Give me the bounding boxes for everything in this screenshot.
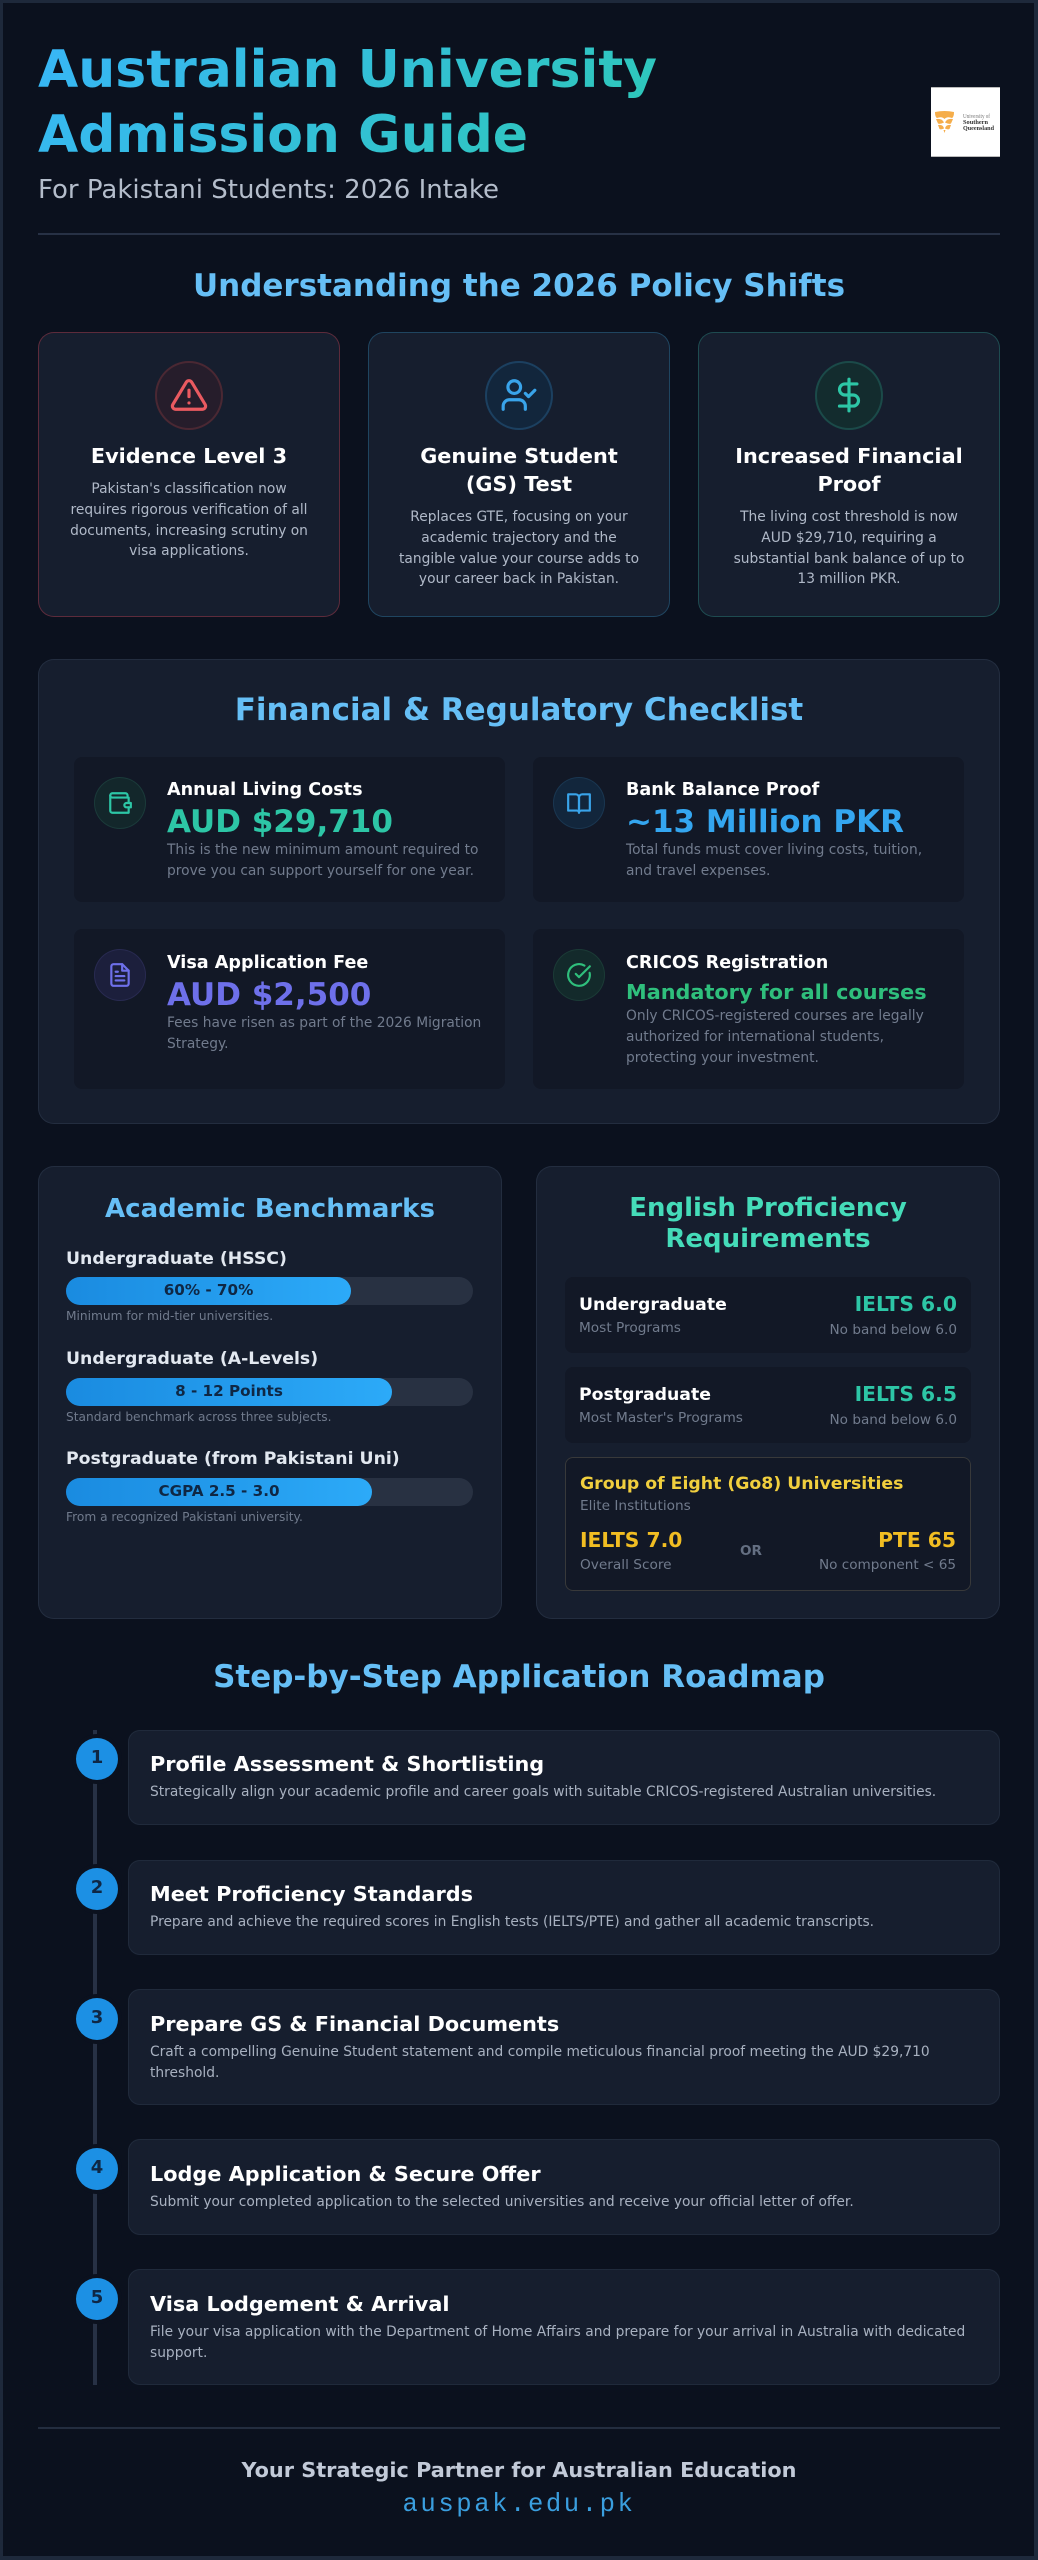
note: Minimum for mid-tier universities. bbox=[66, 1309, 273, 1323]
panel: financial checklist bbox=[38, 659, 1000, 1124]
logo: University of Southern Queensland: Queensland bbox=[963, 126, 995, 132]
footer tagline: Your Strategic Partner for Australian Education bbox=[241, 2458, 796, 2482]
description: authorized for international students, bbox=[626, 1029, 884, 1045]
label: Visa Application Fee bbox=[167, 953, 368, 973]
or separator: OR bbox=[740, 1543, 762, 1559]
card text: your career back in Pakistan. bbox=[419, 571, 619, 587]
description bbox=[626, 1008, 924, 1066]
box heading: Group of Eight (Go8) Universities bbox=[580, 1474, 903, 1494]
label: Undergraduate (HSSC) bbox=[66, 1249, 287, 1269]
card heading: (GS) Test bbox=[466, 472, 572, 496]
note: From a recognized Pakistani university. bbox=[66, 1510, 303, 1524]
IELTS note: Overall Score bbox=[580, 1557, 672, 1573]
value: ~13 Million PKR bbox=[626, 804, 904, 840]
score: IELTS 6.5 bbox=[855, 1382, 957, 1406]
step title: Profile Assessment & Shortlisting bbox=[150, 1752, 544, 1776]
bar: postgraduate: CGPA 2.5 - 3.0 bbox=[158, 1482, 280, 1500]
value: Mandatory for all courses bbox=[626, 980, 927, 1004]
step 5 number: 5 bbox=[91, 2287, 103, 2308]
card text: Replaces GTE, focusing on your bbox=[410, 509, 628, 525]
title: Admission Guide bbox=[38, 105, 528, 165]
card heading: Genuine Student bbox=[420, 444, 618, 468]
bar: A-Levels: 8 - 12 Points bbox=[175, 1382, 283, 1400]
card text: The living cost threshold is now bbox=[740, 509, 958, 525]
description: and travel expenses. bbox=[626, 863, 770, 879]
step title: Meet Proficiency Standards bbox=[150, 1882, 473, 1906]
step text: threshold. bbox=[150, 2065, 219, 2081]
description bbox=[167, 1015, 481, 1052]
step 5 card bbox=[128, 2269, 1000, 2385]
step 5 number bbox=[76, 2278, 118, 2320]
level: Postgraduate bbox=[579, 1385, 711, 1405]
step title: Prepare GS & Financial Documents bbox=[150, 2012, 559, 2036]
bar: postgraduate bbox=[66, 1478, 473, 1506]
bar: A-Levels bbox=[66, 1378, 473, 1406]
label: Undergraduate (A-Levels) bbox=[66, 1349, 318, 1369]
step 2 number: 2 bbox=[91, 1877, 103, 1898]
description bbox=[167, 842, 478, 879]
level note: Most Master's Programs bbox=[579, 1410, 743, 1426]
level note: Most Programs bbox=[579, 1320, 681, 1336]
step 3 number bbox=[76, 1998, 118, 2040]
note: Standard benchmark across three subjects. bbox=[66, 1410, 331, 1424]
step 2 card bbox=[128, 1860, 1000, 1955]
score: IELTS 6.0 bbox=[855, 1292, 957, 1316]
score note: No band below 6.0 bbox=[830, 1412, 957, 1428]
item: annual living costs bbox=[74, 757, 505, 902]
card text: academic trajectory and the bbox=[421, 530, 617, 546]
panel: Evidence Level 3 bbox=[38, 332, 340, 617]
label: Postgraduate (from Pakistani Uni) bbox=[66, 1449, 400, 1469]
step text: Prepare and achieve the required scores in English tests (IELTS/PTE) and gather all academic transcripts. bbox=[150, 1914, 874, 1930]
card text: documents, increasing scrutiny on bbox=[70, 523, 308, 539]
description: prove you can support yourself for one year. bbox=[167, 863, 474, 879]
icon: open book bbox=[553, 777, 605, 829]
description: Total funds must cover living costs, tuition, bbox=[626, 842, 922, 858]
description: This is the new minimum amount required to bbox=[167, 842, 478, 858]
step 1 number bbox=[76, 1738, 118, 1780]
step 3 card bbox=[128, 1989, 1000, 2105]
card text: substantial bank balance of up to bbox=[734, 551, 964, 567]
title: Australian University bbox=[38, 40, 657, 100]
step 2 number bbox=[76, 1868, 118, 1910]
title bbox=[38, 38, 658, 168]
icon: wallet bbox=[94, 777, 146, 829]
bar: HSSC: 60% - 70% bbox=[164, 1281, 253, 1299]
footer url: auspak.edu.pk bbox=[403, 2490, 635, 2519]
card text: 13 million PKR. bbox=[797, 571, 901, 587]
label: Annual Living Costs bbox=[167, 780, 363, 800]
heading: English Proficiency bbox=[629, 1193, 907, 1223]
step text: Craft a compelling Genuine Student statement and compile meticulous financial proof meeting the AUD $29,710 bbox=[150, 2044, 930, 2060]
label: Bank Balance Proof bbox=[626, 780, 819, 800]
step text: Submit your completed application to the selected universities and receive your official letter of offer. bbox=[150, 2194, 854, 2210]
icon: dollar sign bbox=[815, 361, 883, 430]
icon: user check bbox=[485, 361, 553, 430]
heading: roadmap: Step-by-Step Application Roadmap bbox=[213, 1659, 825, 1695]
description: Only CRICOS-registered courses are legally bbox=[626, 1008, 924, 1024]
item: CRICOS registration bbox=[533, 929, 964, 1089]
card heading: Increased Financial bbox=[735, 444, 963, 468]
subtitle: For Pakistani Students: 2026 Intake bbox=[38, 175, 499, 205]
panel: Genuine Student Test bbox=[368, 332, 670, 617]
step 3 number: 3 bbox=[91, 2007, 103, 2028]
heading bbox=[629, 1193, 907, 1254]
logo: University of Southern Queensland bbox=[931, 87, 1000, 157]
icon: warning triangle bbox=[155, 361, 223, 430]
step text: File your visa application with the Department of Home Affairs and prepare for your arrival in Australia with dedicated bbox=[150, 2324, 965, 2340]
box note: Elite Institutions bbox=[580, 1498, 691, 1514]
step 4 number: 4 bbox=[91, 2157, 103, 2178]
logo: University of Southern Queensland: Southern bbox=[963, 120, 989, 126]
step 1 card bbox=[128, 1730, 1000, 1825]
bar: HSSC bbox=[66, 1277, 473, 1305]
logo: University of Southern Queensland: University of bbox=[963, 113, 990, 120]
PTE score: PTE 65 bbox=[878, 1528, 956, 1552]
card text bbox=[399, 509, 639, 587]
card text bbox=[70, 481, 308, 559]
description: Fees have risen as part of the 2026 Migration bbox=[167, 1015, 481, 1031]
step 4 number bbox=[76, 2148, 118, 2190]
level: Undergraduate bbox=[579, 1295, 727, 1315]
panel: academic benchmarks bbox=[38, 1166, 502, 1619]
step title: Lodge Application & Secure Offer bbox=[150, 2162, 541, 2186]
item: visa application fee bbox=[74, 929, 505, 1089]
description: protecting your investment. bbox=[626, 1050, 819, 1066]
card text bbox=[734, 509, 964, 587]
item: bank balance proof bbox=[533, 757, 964, 902]
card text: tangible value your course adds to bbox=[399, 551, 639, 567]
heading: policy shifts: Understanding the 2026 Policy Shifts bbox=[193, 268, 845, 304]
row: undergraduate bbox=[565, 1277, 971, 1353]
card heading: Evidence Level 3 bbox=[91, 444, 287, 468]
score note: No band below 6.0 bbox=[830, 1322, 957, 1338]
heading: checklist: Financial & Regulatory Checklist bbox=[235, 692, 803, 728]
card text: requires rigorous verification of all bbox=[71, 502, 307, 518]
panel: Increased Financial Proof bbox=[698, 332, 1000, 617]
description bbox=[626, 842, 922, 879]
IELTS score: IELTS 7.0 bbox=[580, 1528, 682, 1552]
step text bbox=[150, 2044, 930, 2081]
card heading bbox=[420, 444, 618, 496]
step text bbox=[150, 2324, 965, 2361]
step 1 number: 1 bbox=[91, 1747, 103, 1768]
step text: Strategically align your academic profile and career goals with suitable CRICOS-registered Australian universities. bbox=[150, 1784, 936, 1800]
icon: document bbox=[94, 949, 146, 1001]
roadmap line bbox=[93, 1730, 97, 2385]
value: AUD $2,500 bbox=[167, 977, 371, 1013]
heading: Requirements bbox=[665, 1224, 871, 1254]
card text: AUD $29,710, requiring a bbox=[761, 530, 937, 546]
card heading: Proof bbox=[817, 472, 881, 496]
box: Group of Eight bbox=[565, 1457, 971, 1591]
value: AUD $29,710 bbox=[167, 804, 393, 840]
PTE note: No component < 65 bbox=[819, 1557, 956, 1573]
step title: Visa Lodgement & Arrival bbox=[150, 2292, 450, 2316]
step text: support. bbox=[150, 2345, 207, 2361]
icon: check circle bbox=[553, 949, 605, 1001]
panel: English proficiency bbox=[536, 1166, 1000, 1619]
label: CRICOS Registration bbox=[626, 953, 828, 973]
card text: Pakistan's classification now bbox=[91, 481, 287, 497]
card text: visa applications. bbox=[129, 543, 249, 559]
row: postgraduate bbox=[565, 1367, 971, 1443]
step 4 card bbox=[128, 2139, 1000, 2235]
heading: Academic Benchmarks bbox=[105, 1194, 435, 1224]
description: Strategy. bbox=[167, 1036, 229, 1052]
card heading bbox=[735, 444, 963, 496]
